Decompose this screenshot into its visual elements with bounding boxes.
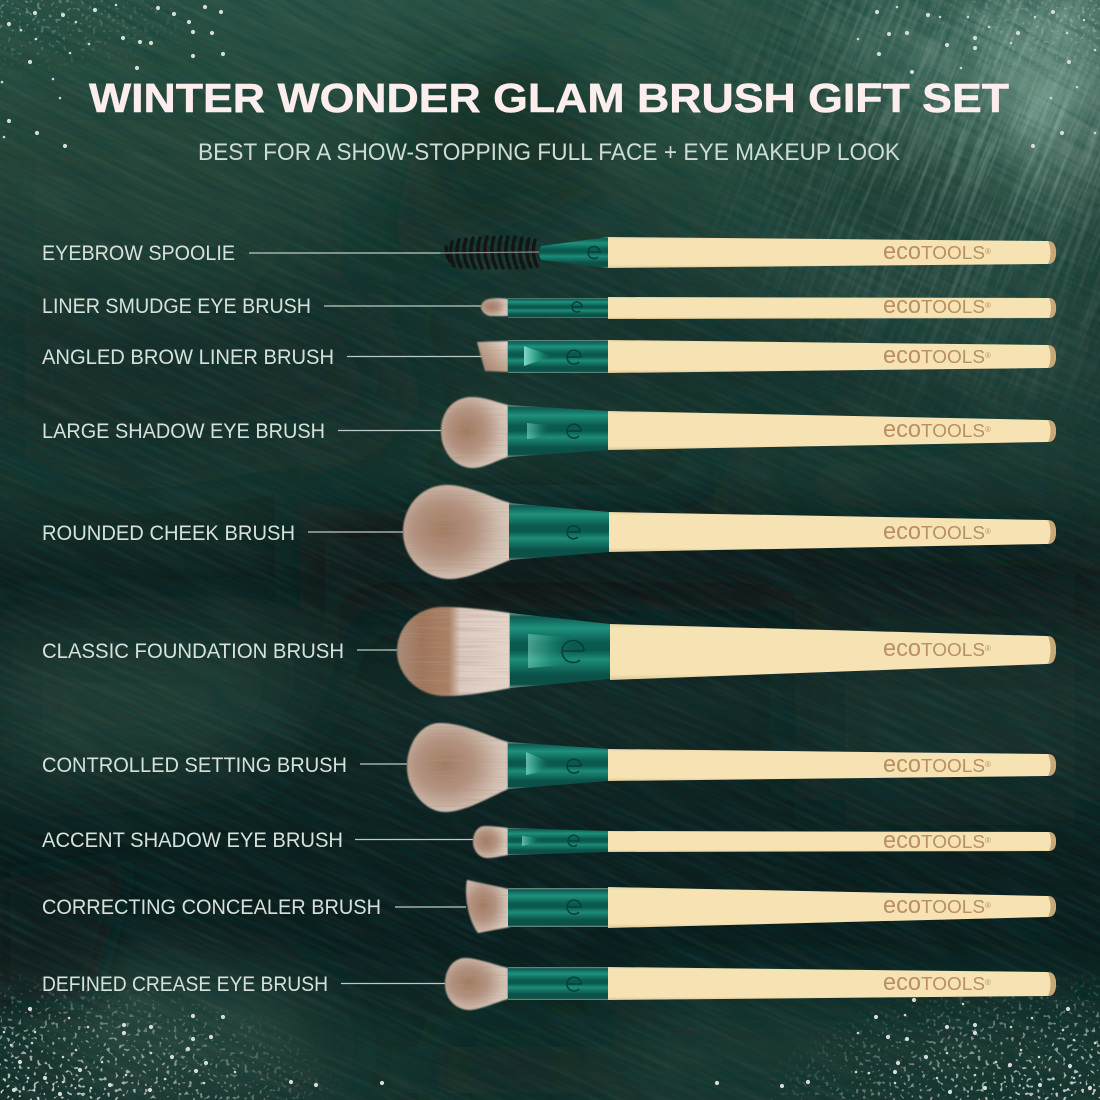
ferrule e mark [572, 302, 582, 312]
brush: large shadow eye brush [441, 397, 1056, 468]
ferrule e mark [588, 247, 600, 259]
leader line: controlled setting [360, 763, 407, 765]
logo [883, 969, 991, 996]
ferrule [508, 967, 608, 1000]
ferrule [539, 237, 608, 268]
leader line: classic foundation [357, 649, 397, 651]
spoolie bristles [440, 237, 541, 268]
handle tip shading [1049, 832, 1056, 851]
handle tip shading [1048, 754, 1056, 776]
ferrule [508, 405, 608, 457]
logo [883, 892, 991, 919]
logo [883, 518, 991, 545]
handle tip shading [1048, 896, 1056, 917]
handle [608, 831, 1056, 852]
subtitle: BEST FOR A SHOW-STOPPING FULL FACE + EYE MAKEUP LOOK [198, 139, 900, 166]
bristles [477, 341, 508, 372]
label: rounded cheek brush: ROUNDED CHEEK BRUSH [42, 521, 295, 545]
brush: defined crease eye brush [445, 958, 1056, 1010]
logo: ® [985, 247, 991, 256]
handle [608, 297, 1056, 319]
brush: eyebrow spoolie [440, 237, 1056, 268]
label: eyebrow spoolie: EYEBROW SPOOLIE [42, 241, 235, 265]
ferrule highlight [528, 634, 575, 668]
ferrule [510, 613, 610, 688]
logo: ® [985, 978, 991, 987]
logo: eco [883, 635, 921, 662]
logo: TOOLS [921, 297, 985, 317]
brush: angled brow liner brush [477, 340, 1056, 373]
ferrule [508, 828, 608, 855]
logo: TOOLS [921, 832, 985, 852]
handle [610, 624, 1056, 680]
leader line: correcting concealer [395, 906, 466, 908]
label: large shadow eye brush: LARGE SHADOW EYE BRUSH [42, 419, 325, 443]
leader line: eyebrow spoolie [249, 252, 441, 254]
bristles [445, 958, 508, 1010]
brush: accent shadow eye brush [473, 826, 1056, 858]
ferrule e mark [568, 835, 579, 846]
label: liner smudge eye brush: LINER SMUDGE EYE BRUSH [42, 294, 311, 318]
handle tip shading [1048, 972, 1056, 996]
ferrule highlight [522, 836, 540, 846]
leader line: rounded cheek [308, 531, 403, 533]
ferrule highlight [526, 752, 550, 775]
label: classic foundation brush: CLASSIC FOUNDATION BRUSH [42, 639, 344, 663]
handle tip shading [1049, 298, 1056, 318]
bristles [397, 607, 510, 696]
ferrule e mark [567, 526, 580, 539]
logo [883, 238, 991, 265]
logo [883, 292, 991, 319]
ferrule e mark [567, 977, 581, 991]
handle tip shading [1048, 520, 1056, 544]
handle [609, 512, 1056, 552]
logo: ® [985, 644, 991, 653]
logo: TOOLS [921, 974, 985, 994]
logo: TOOLS [921, 640, 985, 660]
logo: TOOLS [921, 347, 985, 367]
handle tip shading [1048, 345, 1056, 368]
logo: eco [883, 827, 921, 854]
ferrule e mark [567, 759, 581, 773]
ferrule e mark [562, 641, 584, 663]
handle [608, 967, 1056, 1000]
leader line: large shadow [338, 430, 441, 432]
handle tip shading [1048, 420, 1056, 442]
label: controlled setting brush: CONTROLLED SETTING BRUSH [42, 753, 347, 777]
bristles [473, 826, 508, 858]
logo: ® [985, 527, 991, 536]
handle [608, 411, 1056, 450]
handle [608, 237, 1056, 268]
logo: eco [883, 416, 921, 443]
handle [608, 340, 1056, 373]
ferrule [508, 888, 608, 927]
handle [608, 749, 1056, 781]
ferrule [508, 340, 608, 373]
logo: eco [883, 342, 921, 369]
logo: TOOLS [921, 897, 985, 917]
brush: rounded cheek brush [403, 485, 1056, 579]
ferrule highlight [527, 423, 550, 439]
logo [883, 827, 991, 854]
leader line: accent shadow [355, 838, 473, 840]
logo: eco [883, 892, 921, 919]
logo [883, 751, 991, 778]
logo: eco [883, 238, 921, 265]
ferrule e mark [567, 350, 581, 364]
brush: liner smudge eye brush [481, 292, 1056, 319]
ferrule [508, 742, 608, 789]
brush: classic foundation brush [397, 607, 1056, 696]
logo: TOOLS [921, 756, 985, 776]
bristles [466, 880, 510, 933]
handle tip shading [1048, 636, 1056, 664]
ferrule e mark [567, 424, 581, 438]
logo: eco [883, 518, 921, 545]
ferrule highlight [524, 346, 552, 366]
bristles [407, 723, 508, 812]
label: accent shadow eye brush: ACCENT SHADOW EYE BRUSH [42, 828, 343, 852]
ferrule [508, 298, 608, 318]
leader line: liner smudge [324, 305, 481, 307]
logo: ® [985, 836, 991, 845]
handle [608, 887, 1056, 928]
logo: eco [883, 969, 921, 996]
logo: TOOLS [921, 243, 985, 263]
bristles [441, 397, 508, 468]
brush: controlled setting brush [407, 723, 1056, 812]
logo: eco [883, 751, 921, 778]
title: WINTER WONDER GLAM BRUSH GIFT SET [89, 75, 1009, 121]
logo [883, 635, 991, 662]
logo [883, 416, 991, 443]
logo: ® [985, 351, 991, 360]
leader line: defined crease [341, 982, 445, 984]
logo: eco [883, 292, 921, 319]
ferrule [509, 503, 609, 560]
leader line: angled brow liner [347, 356, 482, 358]
logo: ® [985, 760, 991, 769]
logo: TOOLS [921, 523, 985, 543]
handle tip shading [1048, 241, 1056, 264]
logo: ® [985, 301, 991, 310]
brush: correcting concealer brush [466, 880, 1056, 933]
logo: TOOLS [921, 421, 985, 441]
logo [883, 342, 991, 369]
logo: ® [985, 901, 991, 910]
label: angled brow liner brush: ANGLED BROW LINER BRUSH [42, 345, 334, 369]
logo: ® [985, 425, 991, 434]
label: defined crease eye brush: DEFINED CREASE EYE BRUSH [42, 972, 328, 996]
label: correcting concealer brush: CORRECTING CONCEALER BRUSH [42, 895, 381, 919]
ferrule e mark [567, 900, 581, 914]
bristles [481, 298, 508, 316]
bristles [403, 485, 510, 579]
